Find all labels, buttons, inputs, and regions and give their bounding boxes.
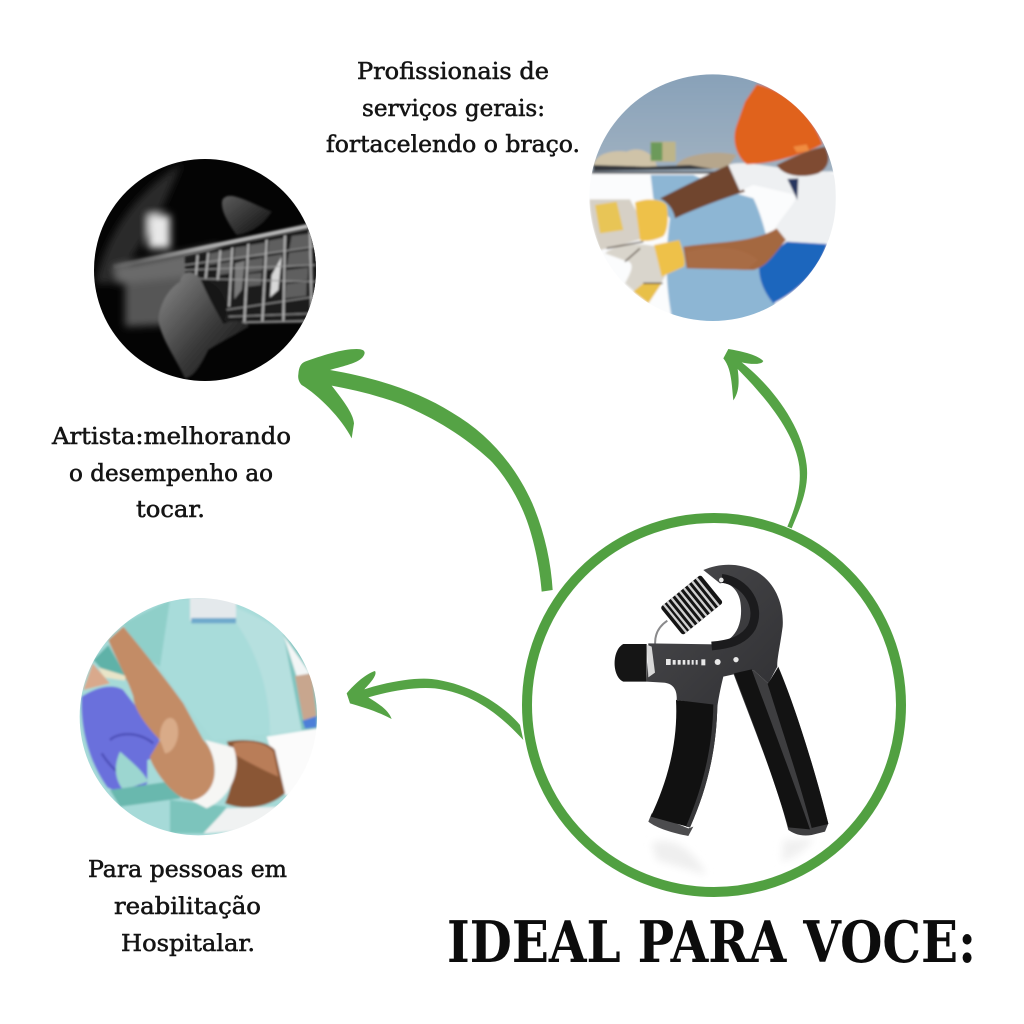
arrow: to rehabilitation — [347, 671, 523, 740]
arrow: to worker — [723, 349, 807, 528]
text: rehabilitation — [88, 857, 287, 957]
photo: hand playing guitar — [94, 159, 316, 381]
spring wire — [655, 621, 667, 647]
text: rehabilitation: reabilitação — [114, 894, 261, 920]
text: artist — [51, 424, 291, 523]
text: artist: Artista:melhorando — [51, 424, 291, 450]
grip reflections — [652, 838, 813, 875]
grip left handle — [648, 813, 693, 836]
text: professionals — [326, 59, 580, 158]
text: professionals: fortacelendo o braço. — [326, 132, 580, 158]
grip upper body — [647, 565, 783, 707]
spring coil — [660, 575, 723, 635]
green ring around grip — [527, 518, 901, 892]
text: artist: tocar. — [136, 497, 205, 523]
photo: hospital rehabilitation hand — [80, 598, 317, 836]
grip right handle — [733, 667, 828, 835]
grip inner loop — [712, 578, 755, 646]
text: professionals: Profissionais de — [357, 59, 549, 85]
text: rehabilitation: Hospitalar. — [121, 931, 255, 957]
grip adjustment knob — [615, 644, 647, 682]
photo: worker with helmet and gloves — [590, 74, 836, 321]
text: artist: o desempenho ao — [69, 461, 273, 487]
text: professionals: serviços gerais: — [362, 96, 545, 122]
icon: hand grip strengthener — [615, 565, 828, 875]
arrow: to artist — [298, 349, 553, 592]
grip scale marks — [666, 578, 739, 665]
text: rehabilitation: Para pessoas em — [88, 857, 287, 883]
